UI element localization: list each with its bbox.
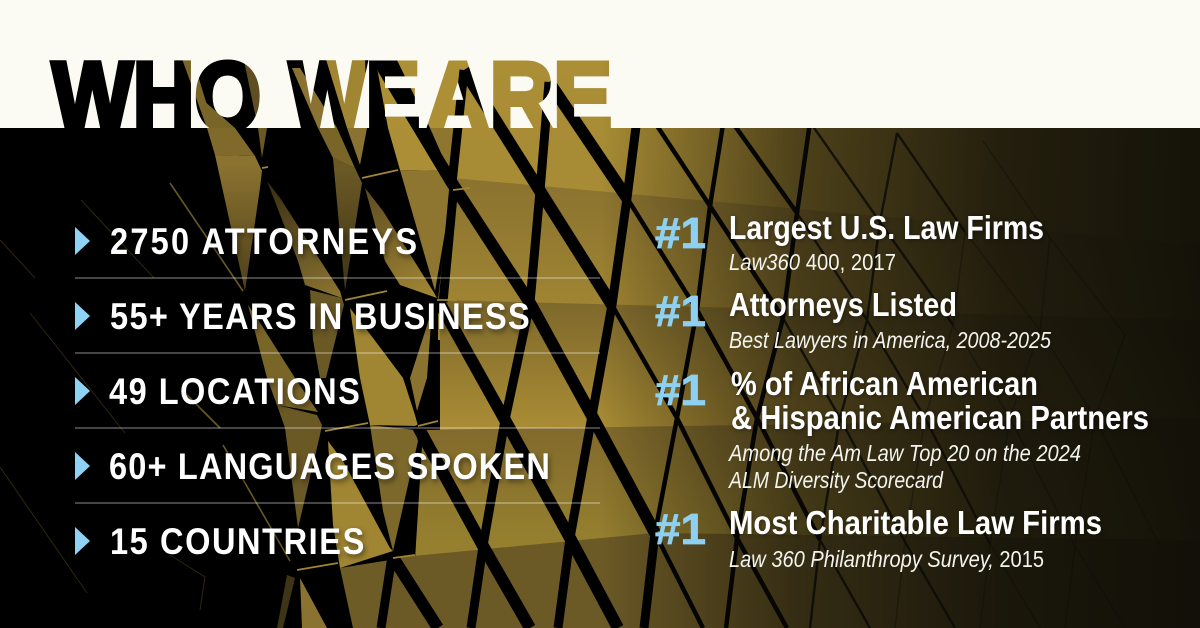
- left column: firm statistics: [75, 221, 600, 562]
- ranking: charitable: Most Charitable Law Firms: [729, 504, 1102, 541]
- ranking: diversity: % of African American: [731, 365, 1038, 402]
- title: WHO WE ARE, letters filled with the facade photo: WE: [289, 42, 420, 151]
- ranking: largest law firms: #1: [655, 209, 706, 258]
- ranking: attorneys listed: [655, 286, 1051, 353]
- stat: locations: 49 LOCATIONS: [109, 371, 360, 412]
- title: WHO WE ARE, letters filled with the facade photo: ARE: [426, 42, 612, 151]
- top cream band: [0, 0, 1200, 128]
- stat: years in business: 55+ YEARS IN BUSINESS: [110, 296, 530, 337]
- ranking: diversity: Among the Am Law Top 20 on the 2024: [727, 440, 1081, 466]
- stat: attorneys: 2750 ATTORNEYS: [110, 221, 417, 262]
- ranking: charitable: [655, 504, 1102, 572]
- ranking: largest law firms: [655, 209, 1044, 275]
- ranking: diversity: ALM Diversity Scorecard: [727, 467, 944, 493]
- ranking: charitable: #1: [655, 505, 706, 554]
- title: WHO WE ARE, letters filled with the facade photo: [52, 42, 612, 151]
- ranking: attorneys listed: Attorneys Listed: [729, 286, 957, 323]
- ranking: largest law firms: Largest U.S. Law Firms: [729, 209, 1044, 246]
- right column: number one rankings: [655, 209, 1149, 572]
- stat: countries: 15 COUNTRIES: [110, 521, 364, 562]
- ranking: attorneys listed: Best Lawyers in America, 2008-2025: [729, 327, 1051, 353]
- ranking: attorneys listed: #1: [655, 287, 706, 336]
- stat: languages: 60+ LANGUAGES SPOKEN: [109, 446, 550, 487]
- ranking: diversity: & Hispanic American Partners: [731, 399, 1149, 436]
- ranking: diversity: [655, 365, 1149, 493]
- ranking: diversity: #1: [655, 366, 706, 415]
- title: WHO WE ARE, letters filled with the facade photo: WHO: [52, 42, 261, 151]
- ranking: charitable: Law 360 Philanthropy Survey, 2015: [729, 546, 1044, 572]
- ranking: largest law firms: Law360 400, 2017: [729, 249, 896, 275]
